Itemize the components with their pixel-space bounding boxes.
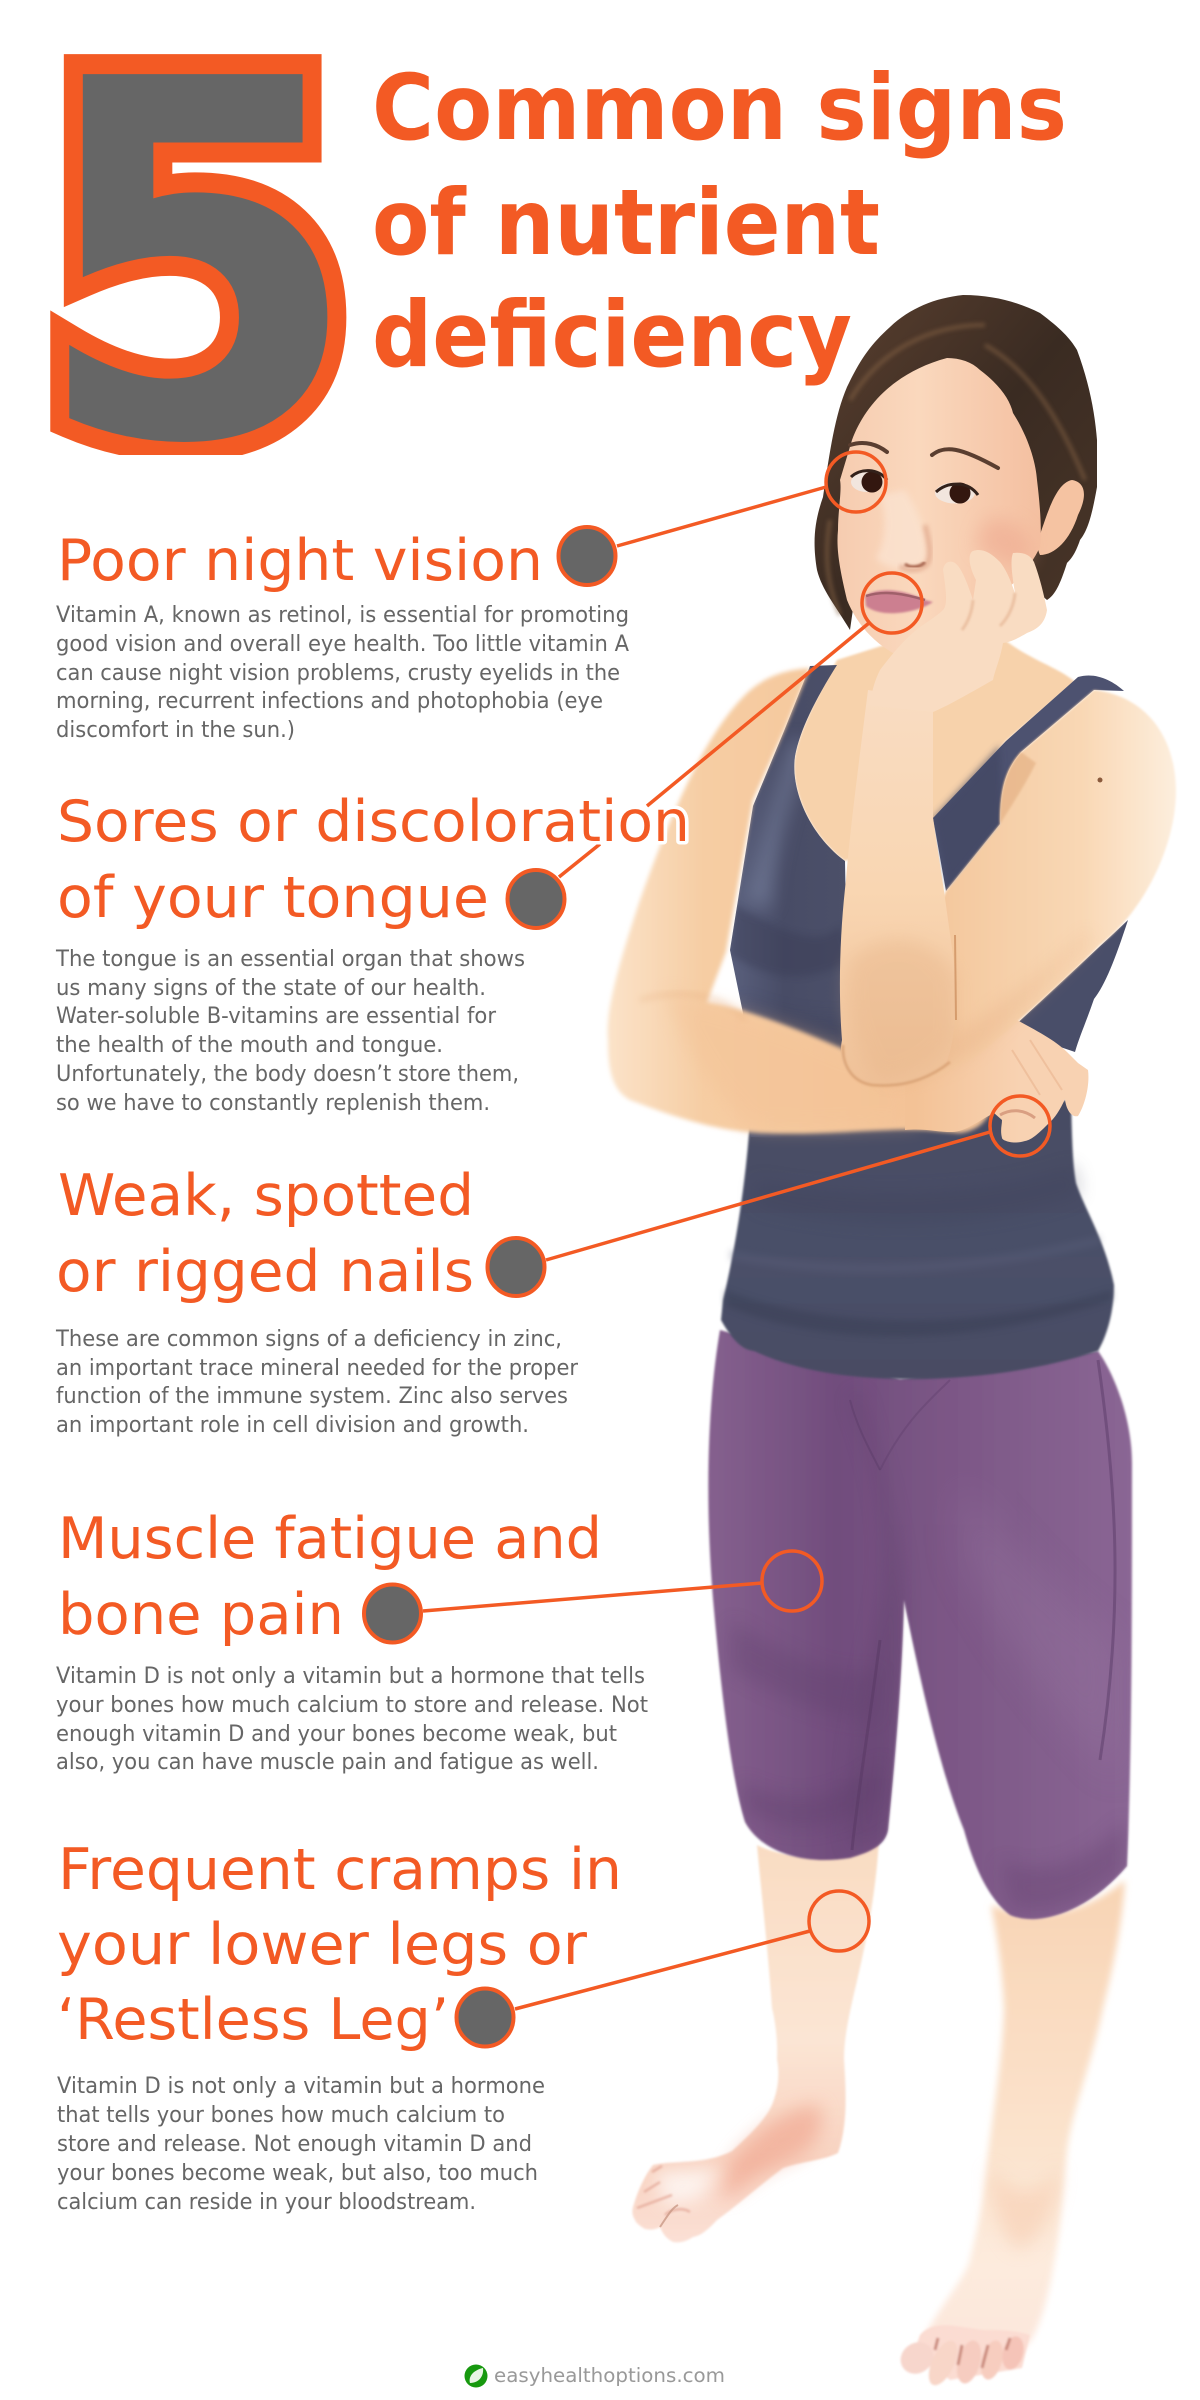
forearm raised to the chin [840,690,956,1086]
right leg [894,1880,1125,2389]
heading: poor night vision: Poor night vision [57,528,543,594]
body: poor night vision: can cause night vision problems, crusty eyelids in the [56,661,620,686]
body: cramps: store and release. Not enough vitamin D and [57,2132,532,2157]
section 3: nails [55,1096,1050,1438]
body: tongue: so we have to constantly replenish them. [56,1091,490,1116]
title: of nutrient [372,171,880,276]
heading: nails: Weak, spotted [58,1163,474,1229]
body: poor night vision: good vision and overall eye health. Too little vitamin A [56,632,629,657]
upper arm on the right [870,690,1176,1085]
body: nails: an important role in cell division and growth. [56,1413,529,1438]
left leg and foot [632,1838,879,2242]
heading: cramps [57,1837,622,2053]
body: tongue: us many signs of the state of our health. [56,976,486,1001]
body: muscle fatigue: also, you can have muscle pain and fatigue as well. [56,1750,599,1775]
heading: muscle fatigue: bone pain [58,1582,344,1648]
heading: sores or discoloration: of your tongue [57,865,489,931]
lower tank top [721,1100,1114,1379]
callout: eye [558,452,886,585]
heading: muscle fatigue [58,1506,602,1648]
body: cramps: that tells your bones how much calcium to [57,2103,505,2128]
arm resting across the waist [608,668,993,1134]
title: Common signs [372,56,1067,161]
eyebrows [850,443,998,468]
title [372,56,1067,388]
heading: sores or discoloration: Sores or discoloration [57,789,690,855]
heading: cramps: your lower legs or [57,1912,588,1978]
section 5: cramps and restless leg [57,1837,869,2215]
chest and neck skin [794,640,1075,861]
body: poor night vision [56,603,629,743]
body: poor night vision: morning, recurrent infections and photophobia (eye [56,689,603,714]
ear [1038,480,1084,555]
heading: nails: or rigged nails [56,1239,474,1305]
body: muscle fatigue: enough vitamin D and your bones become weak, but [56,1722,617,1747]
hair [815,295,1097,630]
body: tongue: the health of the mouth and tongue. [56,1033,443,1058]
website url: easyhealthoptions.com [494,2364,725,2387]
heading: cramps: ‘Restless Leg’ [57,1987,449,2053]
hand supporting the face [868,550,1047,712]
body: nails [55,1327,579,1438]
section 4: muscle fatigue and bone pain [56,1506,822,1775]
body: cramps: calcium can reside in your bloodstream. [57,2190,476,2215]
upper tank top [730,665,1128,1140]
body: muscle fatigue: Vitamin D is not only a vitamin but a hormone that tells [56,1664,645,1689]
callout: thigh [364,1551,822,1642]
body: cramps: Vitamin D is not only a vitamin but a hormone [57,2074,545,2099]
hand at the waist [905,1020,1088,1143]
body: tongue [55,947,525,1116]
body: nails: function of the immune system. Zinc also serves [56,1384,568,1409]
title: deficiency [372,283,852,388]
purple shorts [708,1330,1132,1919]
mouth [865,590,933,613]
body: cramps: your bones become weak, but also, too much [57,2161,538,2186]
body: tongue: The tongue is an essential organ that shows [55,947,525,972]
heading: cramps: Frequent cramps in [58,1837,622,1903]
heading: nails [56,1163,474,1305]
body: tongue: Water-soluble B-vitamins are essential for [56,1004,497,1029]
heading: sores or discoloration [57,789,690,931]
left eye [851,471,887,492]
callout: nails [488,1096,1050,1296]
face [837,358,1041,653]
right eye [935,482,978,504]
body: muscle fatigue: your bones how much calcium to store and release. Not [56,1693,648,1718]
body: poor night vision: discomfort in the sun.) [56,718,295,743]
body: muscle fatigue [56,1664,648,1775]
body: poor night vision: Vitamin A, known as retinol, is essential for promoting [56,603,629,628]
icon: green leaf [464,2364,488,2388]
body: nails: an important trace mineral needed for the proper [56,1356,579,1381]
body: nails: These are common signs of a deficiency in zinc, [55,1327,562,1352]
photo: woman standing [608,295,1176,2389]
footer logo and url [464,2364,725,2388]
body: tongue: Unfortunately, the body doesn’t store them, [56,1062,519,1087]
section 1: poor night vision [56,452,886,743]
callout: calf [456,1891,869,2046]
section 2: sores or discoloration of your tongue [55,573,922,1116]
callout: mouth [508,573,922,928]
body: cramps [57,2074,545,2215]
heading: muscle fatigue: Muscle fatigue and [58,1506,602,1572]
toes of the right foot [894,2325,1030,2389]
